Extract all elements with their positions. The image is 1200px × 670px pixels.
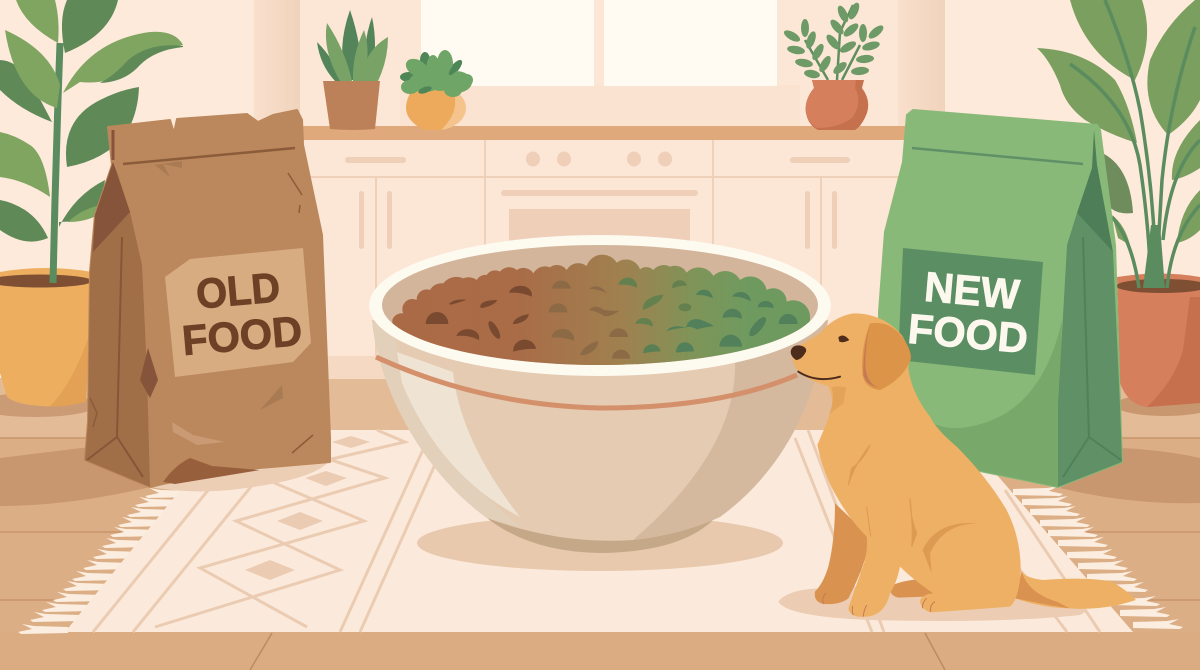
- rug border lines: [93, 430, 1100, 632]
- rug fringe right: [1013, 486, 1183, 629]
- right potted plant: [1037, 0, 1200, 416]
- ground shadow: [778, 588, 1086, 621]
- leaves: [1100, 152, 1133, 213]
- old food label: FOOD: [180, 307, 304, 364]
- leaves: [16, 0, 59, 43]
- top seam: [912, 148, 1083, 164]
- bowl foot: [487, 518, 713, 553]
- bag body: [85, 110, 330, 487]
- old bag shadow on rug: [150, 458, 331, 491]
- new food pieces: [666, 290, 798, 353]
- ear: [862, 323, 911, 390]
- succulent in orange pot: [400, 50, 473, 130]
- golden retriever dog: [778, 313, 1136, 621]
- mouth: [798, 372, 840, 379]
- countertop: [302, 126, 905, 140]
- mixing bowl: [369, 235, 831, 553]
- toes: [823, 593, 935, 617]
- food mixture: [392, 255, 810, 377]
- eye: [838, 336, 849, 342]
- floor: [0, 355, 1200, 670]
- top seam: [123, 148, 295, 164]
- haunch line: [923, 523, 978, 573]
- olive food pieces: [618, 278, 691, 353]
- window: [400, 0, 800, 127]
- rim: [369, 235, 831, 376]
- left potted plant: [0, 0, 183, 417]
- wall pillars: [254, 0, 945, 127]
- left highlight: [397, 352, 520, 517]
- left gusset: [85, 162, 150, 487]
- old food bag: [85, 110, 330, 487]
- rug: [18, 430, 1183, 634]
- old food label: OLD: [194, 263, 282, 318]
- new food label: [898, 248, 1043, 375]
- rug diamond centres: [245, 436, 370, 580]
- outer left band: [372, 320, 520, 527]
- old food label: [165, 248, 311, 377]
- rug fringe left: [18, 488, 195, 634]
- blended food pieces: [549, 281, 630, 359]
- old food pieces: [426, 286, 536, 352]
- lower darker front: [880, 320, 1062, 487]
- chest ruff shading: [829, 387, 846, 414]
- right shade: [633, 320, 828, 540]
- tail: [1015, 572, 1136, 609]
- stripe: [376, 357, 797, 408]
- leafy plant in terracotta pot: [782, 1, 885, 130]
- far hind leg: [890, 543, 970, 598]
- right floor shadow: [1060, 448, 1200, 503]
- nose: [791, 345, 806, 360]
- worn patches: [163, 458, 260, 484]
- bowl shadow: [417, 515, 783, 571]
- left floor shadow: [0, 447, 150, 506]
- right gusset: [1058, 213, 1122, 487]
- snake plant in pot: [317, 10, 388, 130]
- new food bag: [879, 110, 1122, 487]
- new food label: FOOD: [906, 305, 1030, 362]
- body and head: [792, 313, 1021, 617]
- bowl body: [372, 320, 828, 541]
- rug diamond pattern: [155, 430, 405, 627]
- stems: [1070, 0, 1200, 288]
- far front leg: [815, 503, 870, 604]
- bag body: [879, 110, 1122, 487]
- new food label: NEW: [923, 263, 1022, 318]
- counter cabinets and oven: [302, 140, 905, 356]
